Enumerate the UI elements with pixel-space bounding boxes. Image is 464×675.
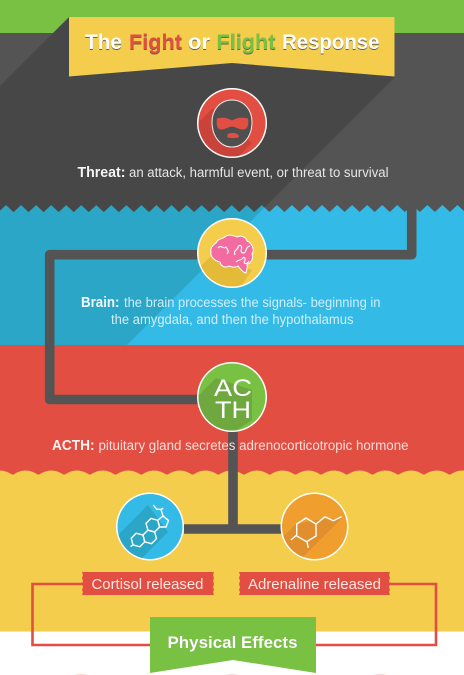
text: brain description: Brain: (81, 295, 120, 311)
banner: physical effects (150, 617, 316, 673)
label: cortisol released (82, 572, 214, 595)
icon: threat masked face (197, 88, 267, 158)
text: ACTH description: pituitary gland secretes adrenocorticotropic hormone (98, 438, 408, 453)
text: threat description: Threat: (78, 165, 126, 181)
icon: cortisol molecule (116, 492, 184, 560)
text: brain description (81, 295, 380, 327)
text: brain description: the brain processes the signals- beginning in (124, 295, 380, 310)
text: brain description: the amygdala, and then the hypothalamus (111, 312, 354, 327)
background: green header band (0, 0, 464, 34)
label: cortisol released: Cortisol released (92, 577, 204, 593)
connector: ACTH to hormones (184, 430, 282, 529)
text: threat description: an attack, harmful event, or threat to survival (129, 165, 389, 180)
title: or (188, 30, 211, 54)
panel: ACTH red background (0, 345, 464, 475)
connector: threat to brain to ACTH (50, 205, 412, 400)
icon: ACTH badge: TH (215, 397, 251, 424)
title: The (85, 30, 122, 54)
icon: ACTH badge: AC (214, 375, 252, 402)
title banner (69, 17, 394, 76)
text: ACTH description: ACTH: (52, 438, 94, 454)
banner: physical effects: Physical Effects (168, 634, 298, 652)
title: Flight (216, 30, 276, 54)
title: Response (282, 30, 380, 54)
icon: adrenaline molecule (280, 492, 348, 560)
icon: brain (197, 218, 267, 288)
label: adrenaline released (239, 572, 390, 595)
icons: tops of next row circles (72, 674, 389, 675)
icon: ACTH badge (197, 362, 267, 432)
red outline connector: hormones to physical effects (32, 584, 436, 645)
title (85, 30, 380, 54)
label: adrenaline released: Adrenaline released (248, 577, 381, 593)
panel: threat dark background (0, 17, 464, 205)
panel: brain blue background (0, 205, 464, 345)
title: Fight (129, 30, 182, 54)
panel: hormones yellow background (0, 470, 464, 632)
